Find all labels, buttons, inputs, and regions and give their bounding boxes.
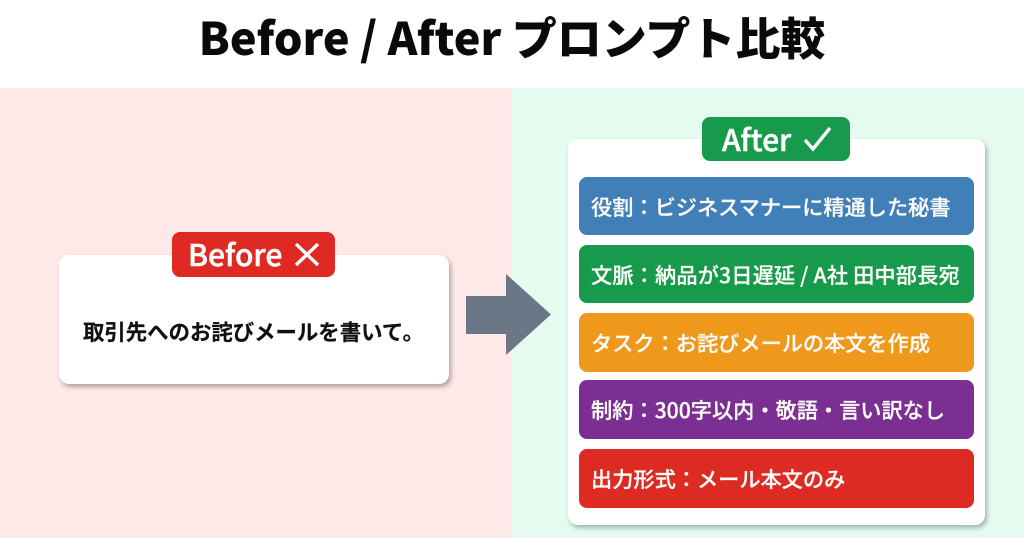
icon: check — [804, 126, 832, 152]
after card — [568, 139, 985, 525]
row: task — [579, 313, 974, 372]
row: constraints — [579, 380, 974, 439]
row: output format: 出力形式：メール本文のみ — [591, 463, 845, 494]
arrow — [466, 274, 551, 355]
row: output format — [579, 449, 974, 508]
row: role — [579, 177, 974, 235]
after badge — [702, 117, 850, 161]
panel: after background — [512, 88, 1024, 538]
title: Before / After プロンプト比較 — [199, 3, 825, 68]
before badge: Before — [188, 231, 282, 275]
before prompt text: 取引先へのお詫びメールを書いて。 — [83, 316, 424, 347]
icon: cross — [294, 242, 320, 266]
after badge: After — [722, 116, 791, 160]
row: task: タスク：お詫びメールの本文を作成 — [591, 327, 930, 358]
row: context — [579, 245, 974, 303]
row: constraints: 制約：300字以内・敬語・言い訳なし — [591, 394, 945, 425]
before card — [59, 255, 449, 384]
row: context: 文脈：納品が3日遅延 / A社 田中部長宛 — [591, 259, 960, 290]
row: role: 役割：ビジネスマナーに精通した秘書 — [591, 191, 951, 222]
title — [0, 0, 1024, 88]
panel: before background — [0, 88, 512, 538]
before badge — [172, 232, 335, 277]
